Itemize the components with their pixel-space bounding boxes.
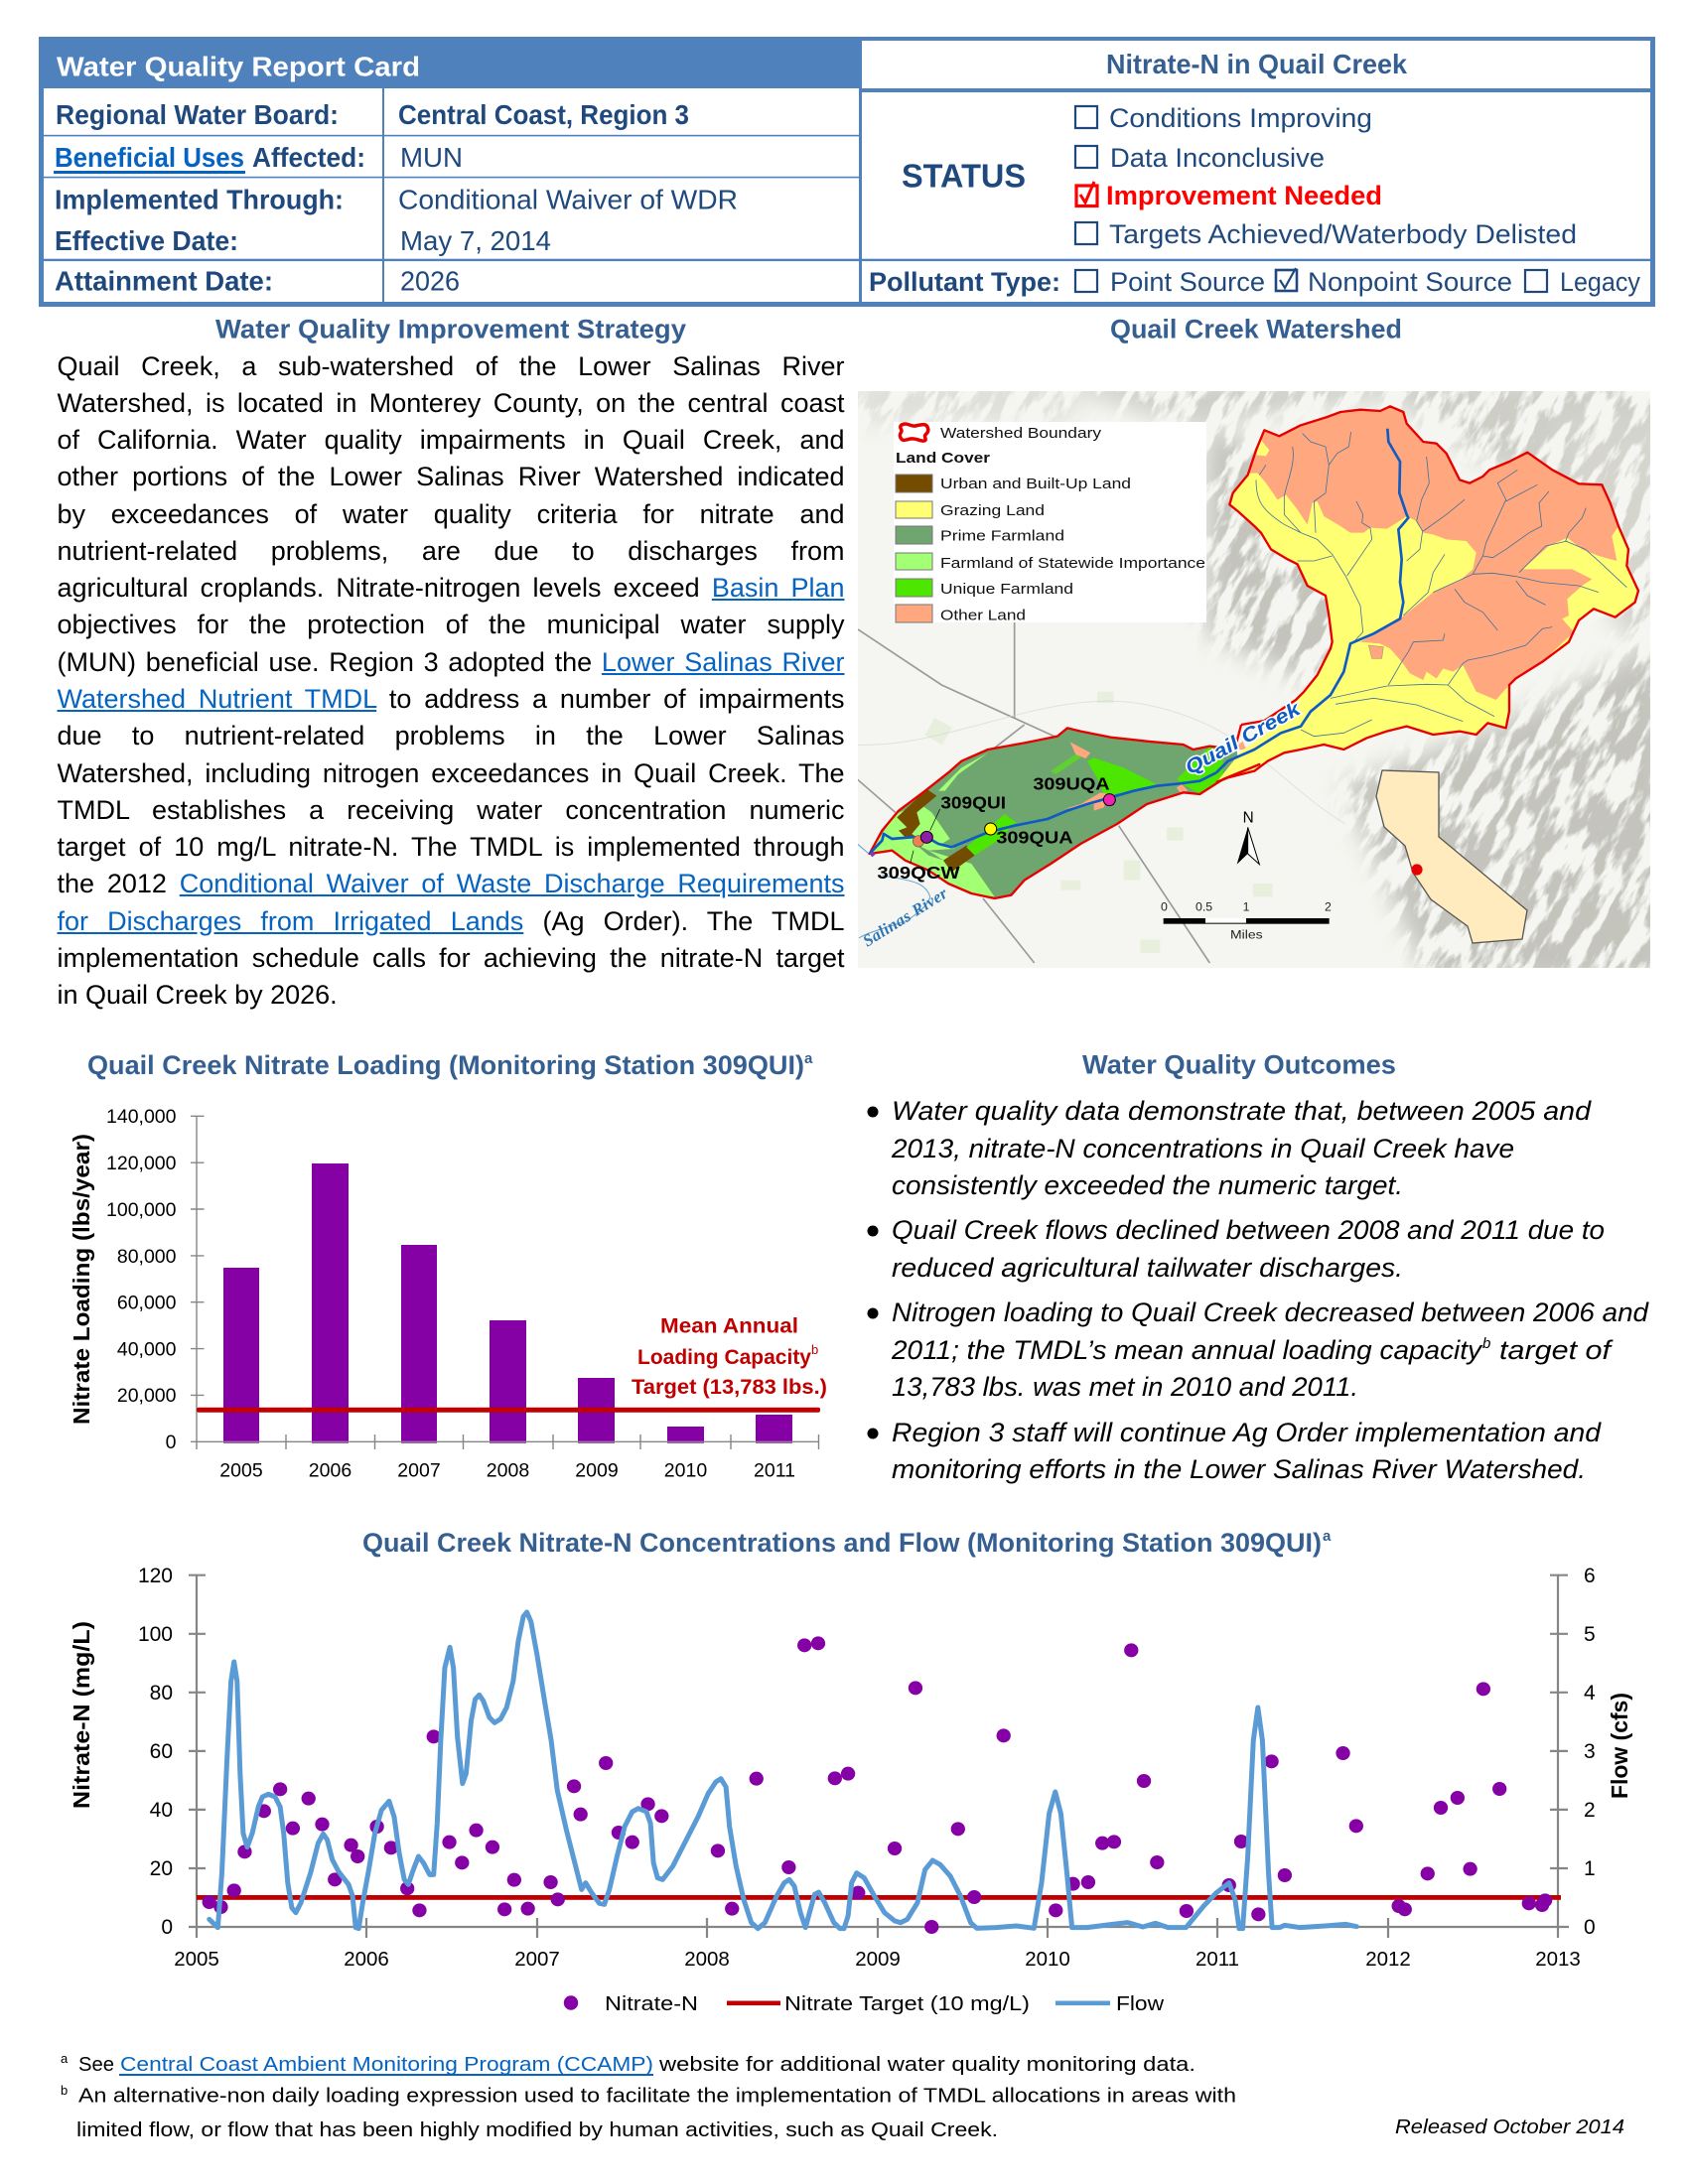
callout: mean annual loading capacity <box>632 1314 827 1399</box>
row: implemented through <box>55 185 738 215</box>
pollutant type row: Nonpoint Source <box>1308 267 1512 297</box>
heading: concentrations and flow chart: Quail Creek Nitrate-N Concentrations and Flow (Monitoring Station 309QUI) <box>362 1528 1322 1558</box>
scale bar: Miles <box>1230 927 1263 941</box>
legend: watershed boundary: Watershed Boundary <box>940 426 1102 442</box>
y axis labels <box>106 1106 177 1453</box>
chart legend: Nitrate-N <box>605 1993 698 2015</box>
row: effective date <box>55 225 551 256</box>
row: attainment date: Attainment Date: <box>55 266 273 297</box>
bullet 4: Region 3 staff will continue Ag Order implementation and <box>892 1418 1602 1447</box>
text block: water quality improvement strategy: the 2012 Conditional Waiver of Waste Discharge Requirements <box>58 869 844 898</box>
right axis labels: 4 <box>1584 1682 1596 1705</box>
left axis labels: 0 <box>161 1916 173 1939</box>
x axis labels: 2011 <box>1196 1948 1239 1971</box>
callout: mean annual loading capacity: Loading Capacity <box>637 1345 811 1369</box>
bullet 3: b <box>1482 1335 1490 1352</box>
text block: water quality improvement strategy: target of 10 mg/L nitrate-N. The TMDL is implemented through <box>58 832 844 862</box>
text block: water quality improvement strategy: for Discharges from Irrigated Lands (Ag Order). The TMDL <box>58 905 844 935</box>
callout: mean annual loading capacity: Target (13,783 lbs.) <box>632 1375 827 1399</box>
pollutant type row: Legacy <box>1560 267 1640 297</box>
map: lower watershed land cover <box>870 728 1246 898</box>
status option: targets achieved: Targets Achieved/Waterbody Delisted <box>1109 219 1577 249</box>
scale bar <box>1162 902 1331 939</box>
text block: water quality improvement strategy: of California. Water quality impairments in Quail Creek, and <box>58 425 844 455</box>
station 309UQA <box>1033 773 1115 806</box>
row: regional water board: Central Coast, Region 3 <box>398 99 689 130</box>
station 309QCW <box>877 836 960 883</box>
legend item: statewide importance: Farmland of Statewide Importance <box>940 556 1205 572</box>
footnote a: a <box>61 2051 69 2066</box>
pollutant type row <box>869 267 1640 297</box>
status label: STATUS <box>902 157 1026 195</box>
status option: data inconclusive: Data Inconclusive <box>1110 143 1325 173</box>
x axis labels: 2010 <box>664 1460 707 1482</box>
legend item: urban <box>896 475 1131 492</box>
station 309QUI <box>920 792 1006 843</box>
bullet 4: monitoring efforts in the Lower Salinas River Watershed. <box>892 1454 1586 1484</box>
text block: water quality improvement strategy: (MUN) beneficial use. Region 3 adopted the Lower Salinas River <box>58 647 844 677</box>
text block: water quality improvement strategy: agricultural croplands. Nitrate-nitrogen levels exceed Basin Plan <box>58 573 844 603</box>
text block: water quality improvement strategy: TMDL establishes a receiving water concentration numeric <box>58 795 844 825</box>
footnote a <box>61 2051 1196 2076</box>
text block: water quality improvement strategy: Watershed, is located in Monterey County, on the central coast <box>58 388 844 418</box>
right axis labels: 6 <box>1584 1565 1596 1587</box>
chart legend: Nitrate Target (10 mg/L) <box>784 1993 1030 2015</box>
row: regional water board: Regional Water Board: <box>56 99 339 130</box>
y axis labels: 60,000 <box>117 1293 177 1314</box>
x axis labels: 2008 <box>487 1460 529 1482</box>
footnote a: Central Coast Ambient Monitoring Program (CCAMP) <box>120 2053 653 2076</box>
map background roads and river <box>849 617 1345 963</box>
scale bar: 0.5 <box>1196 899 1212 913</box>
chart legend <box>564 1993 1165 2015</box>
target line <box>197 1895 1561 1900</box>
text block: water quality improvement strategy: in Quail Creek by 2026. <box>58 980 338 1010</box>
text block: water quality improvement strategy: Watershed Nutrient TMDL to address a number of impairments <box>58 684 844 714</box>
legend item: statewide importance <box>896 553 1205 572</box>
legend item: grazing <box>896 501 1045 519</box>
locator map: California <box>1376 770 1527 943</box>
y axis labels: 0 <box>166 1432 177 1453</box>
row: beneficial uses: MUN <box>400 142 463 173</box>
left axis labels: 60 <box>150 1740 173 1763</box>
map legend <box>894 422 1206 623</box>
x axis labels: 2011 <box>754 1460 795 1482</box>
bullet 2: reduced agricultural tailwater discharges. <box>892 1253 1403 1283</box>
x axis labels: 2005 <box>219 1460 263 1482</box>
x axis labels: 2008 <box>684 1948 730 1971</box>
x axis labels: 2007 <box>397 1460 441 1482</box>
legend item: other <box>896 605 1026 623</box>
bar chart: nitrate loading <box>69 1106 827 1482</box>
x axis labels: 2012 <box>1365 1948 1411 1971</box>
footnote b: b <box>61 2083 68 2098</box>
left axis labels: 80 <box>150 1682 173 1705</box>
pollutant type row: Point Source <box>1110 267 1265 297</box>
heading: report card: Water Quality Report Card <box>57 52 420 82</box>
right axis labels: 0 <box>1584 1916 1596 1939</box>
text block: water quality improvement strategy: implementation schedule calls for achieving the nitrate-N target <box>58 943 844 973</box>
status option: conditions improving: Conditions Improving <box>1109 103 1372 133</box>
y axis labels: 20,000 <box>117 1385 177 1407</box>
x axis labels: 2007 <box>514 1948 560 1971</box>
bullet 3: Nitrogen loading to Quail Creek decreased between 2006 and <box>892 1297 1649 1327</box>
legend: watershed boundary <box>900 424 1102 442</box>
heading: nitrate loading chart: Quail Creek Nitrate Loading (Monitoring Station 309QUI) <box>87 1050 804 1080</box>
x axis labels: 2006 <box>344 1948 389 1971</box>
map: lower boundary, creek and stations <box>859 698 1332 950</box>
bullet 1: consistently exceeded the numeric target. <box>892 1170 1403 1200</box>
legend item: unique: Unique Farmland <box>940 582 1073 598</box>
left axis labels: 120 <box>138 1565 173 1587</box>
row: implemented through: Implemented Through: <box>55 185 344 215</box>
label: Quail Creek: Quail Creek <box>1182 698 1305 779</box>
x axis labels <box>219 1460 795 1482</box>
station 309UQA: 309UQA <box>1033 773 1110 793</box>
x axis labels: 2010 <box>1025 1948 1070 1971</box>
y axis labels: 100,000 <box>106 1199 177 1221</box>
x axis labels: 2009 <box>855 1948 901 1971</box>
text block: water quality improvement strategy: other portions of the Lower Salinas River Watershed indicated <box>58 462 844 491</box>
right axis labels: 2 <box>1584 1799 1596 1822</box>
icon: north arrow: N <box>1243 810 1254 827</box>
chart: nitrate-N concentrations and flow <box>69 1565 1632 2015</box>
row: regional water board <box>56 99 689 130</box>
x axis labels: 2013 <box>1535 1948 1581 1971</box>
map: upper watershed land cover <box>1216 406 1638 782</box>
pollutant type row: Pollutant Type: <box>869 267 1060 297</box>
heading: nitrate-N in Quail Creek: Nitrate-N in Quail Creek <box>1106 49 1407 79</box>
heading: strategy: Water Quality Improvement Strategy <box>215 315 686 344</box>
left axis labels: 100 <box>138 1623 173 1646</box>
x axis labels: 2006 <box>309 1460 352 1482</box>
bullet 1 <box>868 1096 1592 1200</box>
row: effective date: May 7, 2014 <box>400 225 551 256</box>
scatter: nitrate-N samples <box>203 1636 1552 1934</box>
panel: outcomes bullets <box>868 1096 1649 1484</box>
row: beneficial uses <box>54 142 463 174</box>
map: main creek upper <box>1216 429 1408 772</box>
text block: water quality improvement strategy <box>58 351 844 1010</box>
bullet 1: Water quality data demonstrate that, between 2005 and <box>892 1096 1592 1126</box>
footnote b: limited flow, or flow that has been highly modified by human activities, such as Quail Creek. <box>76 2118 998 2141</box>
bullet 3 <box>868 1297 1649 1402</box>
row: implemented through: Conditional Waiver of WDR <box>398 185 738 215</box>
map: watershed boundary upper <box>1216 406 1638 782</box>
heading: nitrate loading chart: a <box>804 1050 813 1067</box>
right axis title: Flow (cfs) <box>1607 1693 1632 1799</box>
release date: Released October 2014 <box>1395 2116 1624 2138</box>
bullet 3: 2011; the TMDL’s mean annual loading capacity <box>891 1335 1483 1365</box>
bullet 1: 2013, nitrate-N concentrations in Quail Creek have <box>891 1134 1514 1163</box>
station 309QUA: 309QUA <box>996 828 1073 848</box>
right axis labels: 3 <box>1584 1740 1596 1763</box>
left axis labels: 40 <box>150 1799 173 1822</box>
text block: water quality improvement strategy: nutrient-related problems, are due to discharges from <box>58 536 844 566</box>
legend item: other: Other Land <box>940 608 1026 623</box>
scale bar: 1 <box>1243 899 1250 913</box>
row: attainment date: 2026 <box>400 266 460 297</box>
row: effective date: Effective Date: <box>55 225 238 256</box>
legend item: prime <box>896 526 1064 544</box>
panel: watershed map <box>858 391 1650 968</box>
row: attainment date <box>55 266 460 297</box>
legend item: prime: Prime Farmland <box>940 528 1064 544</box>
scale bar: 0 <box>1161 899 1168 913</box>
legend heading: land cover: Land Cover <box>896 451 990 467</box>
heading: watershed: Quail Creek Watershed <box>1110 315 1402 344</box>
bullet 4 <box>868 1418 1602 1484</box>
chart legend: Flow <box>1116 1993 1165 2015</box>
left axis labels: 20 <box>150 1857 173 1880</box>
footnote b: An alternative-non daily loading expression used to facilitate the implementation of TMDL allocations in areas with <box>78 2085 1236 2108</box>
text block: water quality improvement strategy: Watershed, including nitrogen exceedances in Quail Creek. The <box>58 758 844 788</box>
flow line <box>210 1612 1356 1929</box>
target line <box>197 1408 820 1413</box>
heading: water quality outcomes: Water Quality Outcomes <box>1082 1050 1396 1080</box>
text block: water quality improvement strategy: Quail Creek, a sub-watershed of the Lower Salinas River <box>58 351 844 381</box>
row: beneficial uses: Beneficial Uses <box>55 142 244 173</box>
row: beneficial uses: Affected: <box>252 142 365 173</box>
x axis labels <box>174 1948 1581 1971</box>
y axis labels: 40,000 <box>117 1338 177 1360</box>
legend item: urban: Urban and Built-Up Land <box>940 477 1131 492</box>
bullet 2: Quail Creek flows declined between 2008 and 2011 due to <box>892 1215 1605 1245</box>
footnote a: website for additional water quality monitoring data. <box>658 2053 1196 2076</box>
bullet 3: target of <box>1499 1335 1614 1365</box>
station 309QCW: 309QCW <box>877 863 960 883</box>
legend item: unique <box>896 579 1073 598</box>
panel: report card table <box>39 37 1655 307</box>
bars <box>223 1163 792 1443</box>
bullet 2 <box>868 1215 1605 1283</box>
text block: water quality improvement strategy: due to nutrient-related problems in the Lower Salinas <box>58 721 844 751</box>
text block: water quality improvement strategy: by exceedances of water quality criteria for nitrate and <box>58 499 844 529</box>
scale bar: 2 <box>1325 899 1332 913</box>
footnote a: See <box>78 2053 114 2076</box>
callout: mean annual loading capacity: Mean Annual <box>660 1314 798 1338</box>
heading: concentrations and flow chart: a <box>1323 1528 1332 1545</box>
x axis labels: 2005 <box>174 1948 219 1971</box>
text block: water quality improvement strategy: objectives for the protection of the municipal water supply <box>58 610 844 639</box>
legend item: grazing: Grazing Land <box>940 503 1045 519</box>
y axis labels: 120,000 <box>106 1153 177 1174</box>
label: Salinas River: Salinas River <box>859 884 951 950</box>
y axis labels: 140,000 <box>106 1106 177 1128</box>
status option: improvement needed (checked): Improvement Needed <box>1106 181 1382 210</box>
bullet 3: 13,783 lbs. was met in 2010 and 2011. <box>892 1372 1358 1402</box>
station 309QUI: 309QUI <box>940 792 1006 812</box>
y axis title: Nitrate Loading (lbs/year) <box>69 1134 94 1425</box>
station 309QUA <box>985 823 1073 848</box>
footnote b <box>61 2083 1236 2141</box>
right axis labels: 5 <box>1584 1623 1596 1646</box>
map: tributaries <box>1256 432 1626 737</box>
y axis labels: 80,000 <box>117 1246 177 1268</box>
left axis title: Nitrate-N (mg/L) <box>69 1621 94 1809</box>
right axis labels <box>1584 1565 1596 1939</box>
right axis labels: 1 <box>1584 1857 1596 1880</box>
left axis labels <box>138 1565 173 1939</box>
icon: north arrow <box>1237 810 1259 865</box>
callout: mean annual loading capacity: b <box>811 1342 818 1357</box>
x axis labels: 2009 <box>575 1460 619 1482</box>
